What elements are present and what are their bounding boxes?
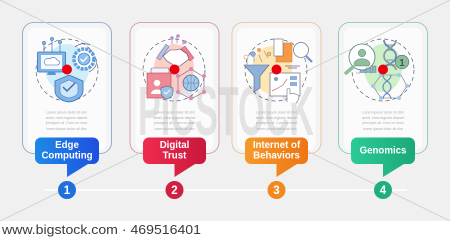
label: Internet of Behaviors: Behaviors xyxy=(253,150,300,162)
step number 3 xyxy=(268,181,286,199)
text block: card 4: principes at. Cum no movi xyxy=(362,121,404,125)
label: Internet of Behaviors xyxy=(245,138,308,177)
icon: digital trust xyxy=(143,34,206,101)
text block: card 4: amet, mea regione diamet xyxy=(362,116,404,120)
text block: card 2: lorem ipsum dolor sit dim xyxy=(155,127,194,131)
text block: card 2: amet, mea regione diamet xyxy=(154,116,195,120)
icon: info badge: 1 xyxy=(399,58,405,69)
footer strip xyxy=(0,221,450,241)
text block: card 3: amet, mea regione diamet xyxy=(256,116,297,120)
icon: handshake xyxy=(157,34,194,66)
step number 4 xyxy=(374,181,392,199)
icon: magnifier with person xyxy=(346,44,376,73)
text block: card 2: Lorem ipsum dolor sit dim xyxy=(154,110,195,114)
step number 2: 2 xyxy=(171,185,178,197)
timeline line xyxy=(44,189,407,191)
step number 3: 3 xyxy=(273,185,280,197)
icon: edge computing xyxy=(36,37,98,102)
footer text: www.bigstock.com · 469516401 xyxy=(1,222,201,237)
panel: digital trust card xyxy=(130,22,219,154)
label: Edge Computing: Computing xyxy=(41,150,93,162)
text block: card 1: Lorem ipsum dolor sit dim xyxy=(46,110,87,114)
label: Digital Trust xyxy=(143,138,206,177)
label: Edge Computing xyxy=(35,138,99,177)
icon: molecule with helix xyxy=(371,73,409,100)
icon: DNA helix xyxy=(384,40,396,70)
text block: card 1: principes at. Cum no movi xyxy=(46,121,87,125)
step number 1: 1 xyxy=(64,185,71,197)
text block: card 3: principes at. Cum no movi xyxy=(256,121,297,125)
label: Genomics xyxy=(351,138,415,177)
panel: genomics card xyxy=(338,22,428,154)
icon: monitor with cloud xyxy=(38,37,66,75)
text block: card 3: Lorem ipsum dolor sit dim xyxy=(256,110,297,114)
text block: card 1: lorem ipsum dolor sit dim xyxy=(47,127,86,131)
step number 4: 4 xyxy=(380,185,387,197)
icon: shield with check xyxy=(55,75,83,102)
text block: card 4: Lorem ipsum dolor sit dim xyxy=(362,110,404,114)
label: Internet of Behaviors: Internet of xyxy=(253,140,301,151)
icon: globe network xyxy=(176,67,206,100)
step number 2 xyxy=(166,181,184,199)
label: Digital Trust: Trust xyxy=(163,150,187,162)
panel: edge computing card xyxy=(22,22,112,154)
label: Edge Computing: Edge xyxy=(55,140,79,151)
label: Digital Trust: Digital xyxy=(160,140,189,151)
text block: card 3: lorem ipsum dolor sit dim xyxy=(257,127,296,131)
panel: internet of behaviors card xyxy=(232,22,321,154)
icon: dashboard with hand xyxy=(270,73,300,103)
label: Genomics: Genomics xyxy=(360,146,406,156)
icon: internet of behaviors xyxy=(244,39,312,103)
text block: card 4: lorem ipsum dolor sit dim xyxy=(363,127,403,131)
icon: folder with person xyxy=(147,68,173,99)
icon: genomics xyxy=(346,39,414,101)
icon: documents xyxy=(274,39,300,68)
icon: magnifier xyxy=(294,42,312,62)
icon: gear with check xyxy=(74,44,97,72)
icon: funnel xyxy=(244,48,271,92)
step number 1 xyxy=(58,181,76,199)
text block: card 1: amet, mea regione diamet xyxy=(46,116,87,120)
text block: card 2: principes at. Cum no movi xyxy=(154,121,195,125)
